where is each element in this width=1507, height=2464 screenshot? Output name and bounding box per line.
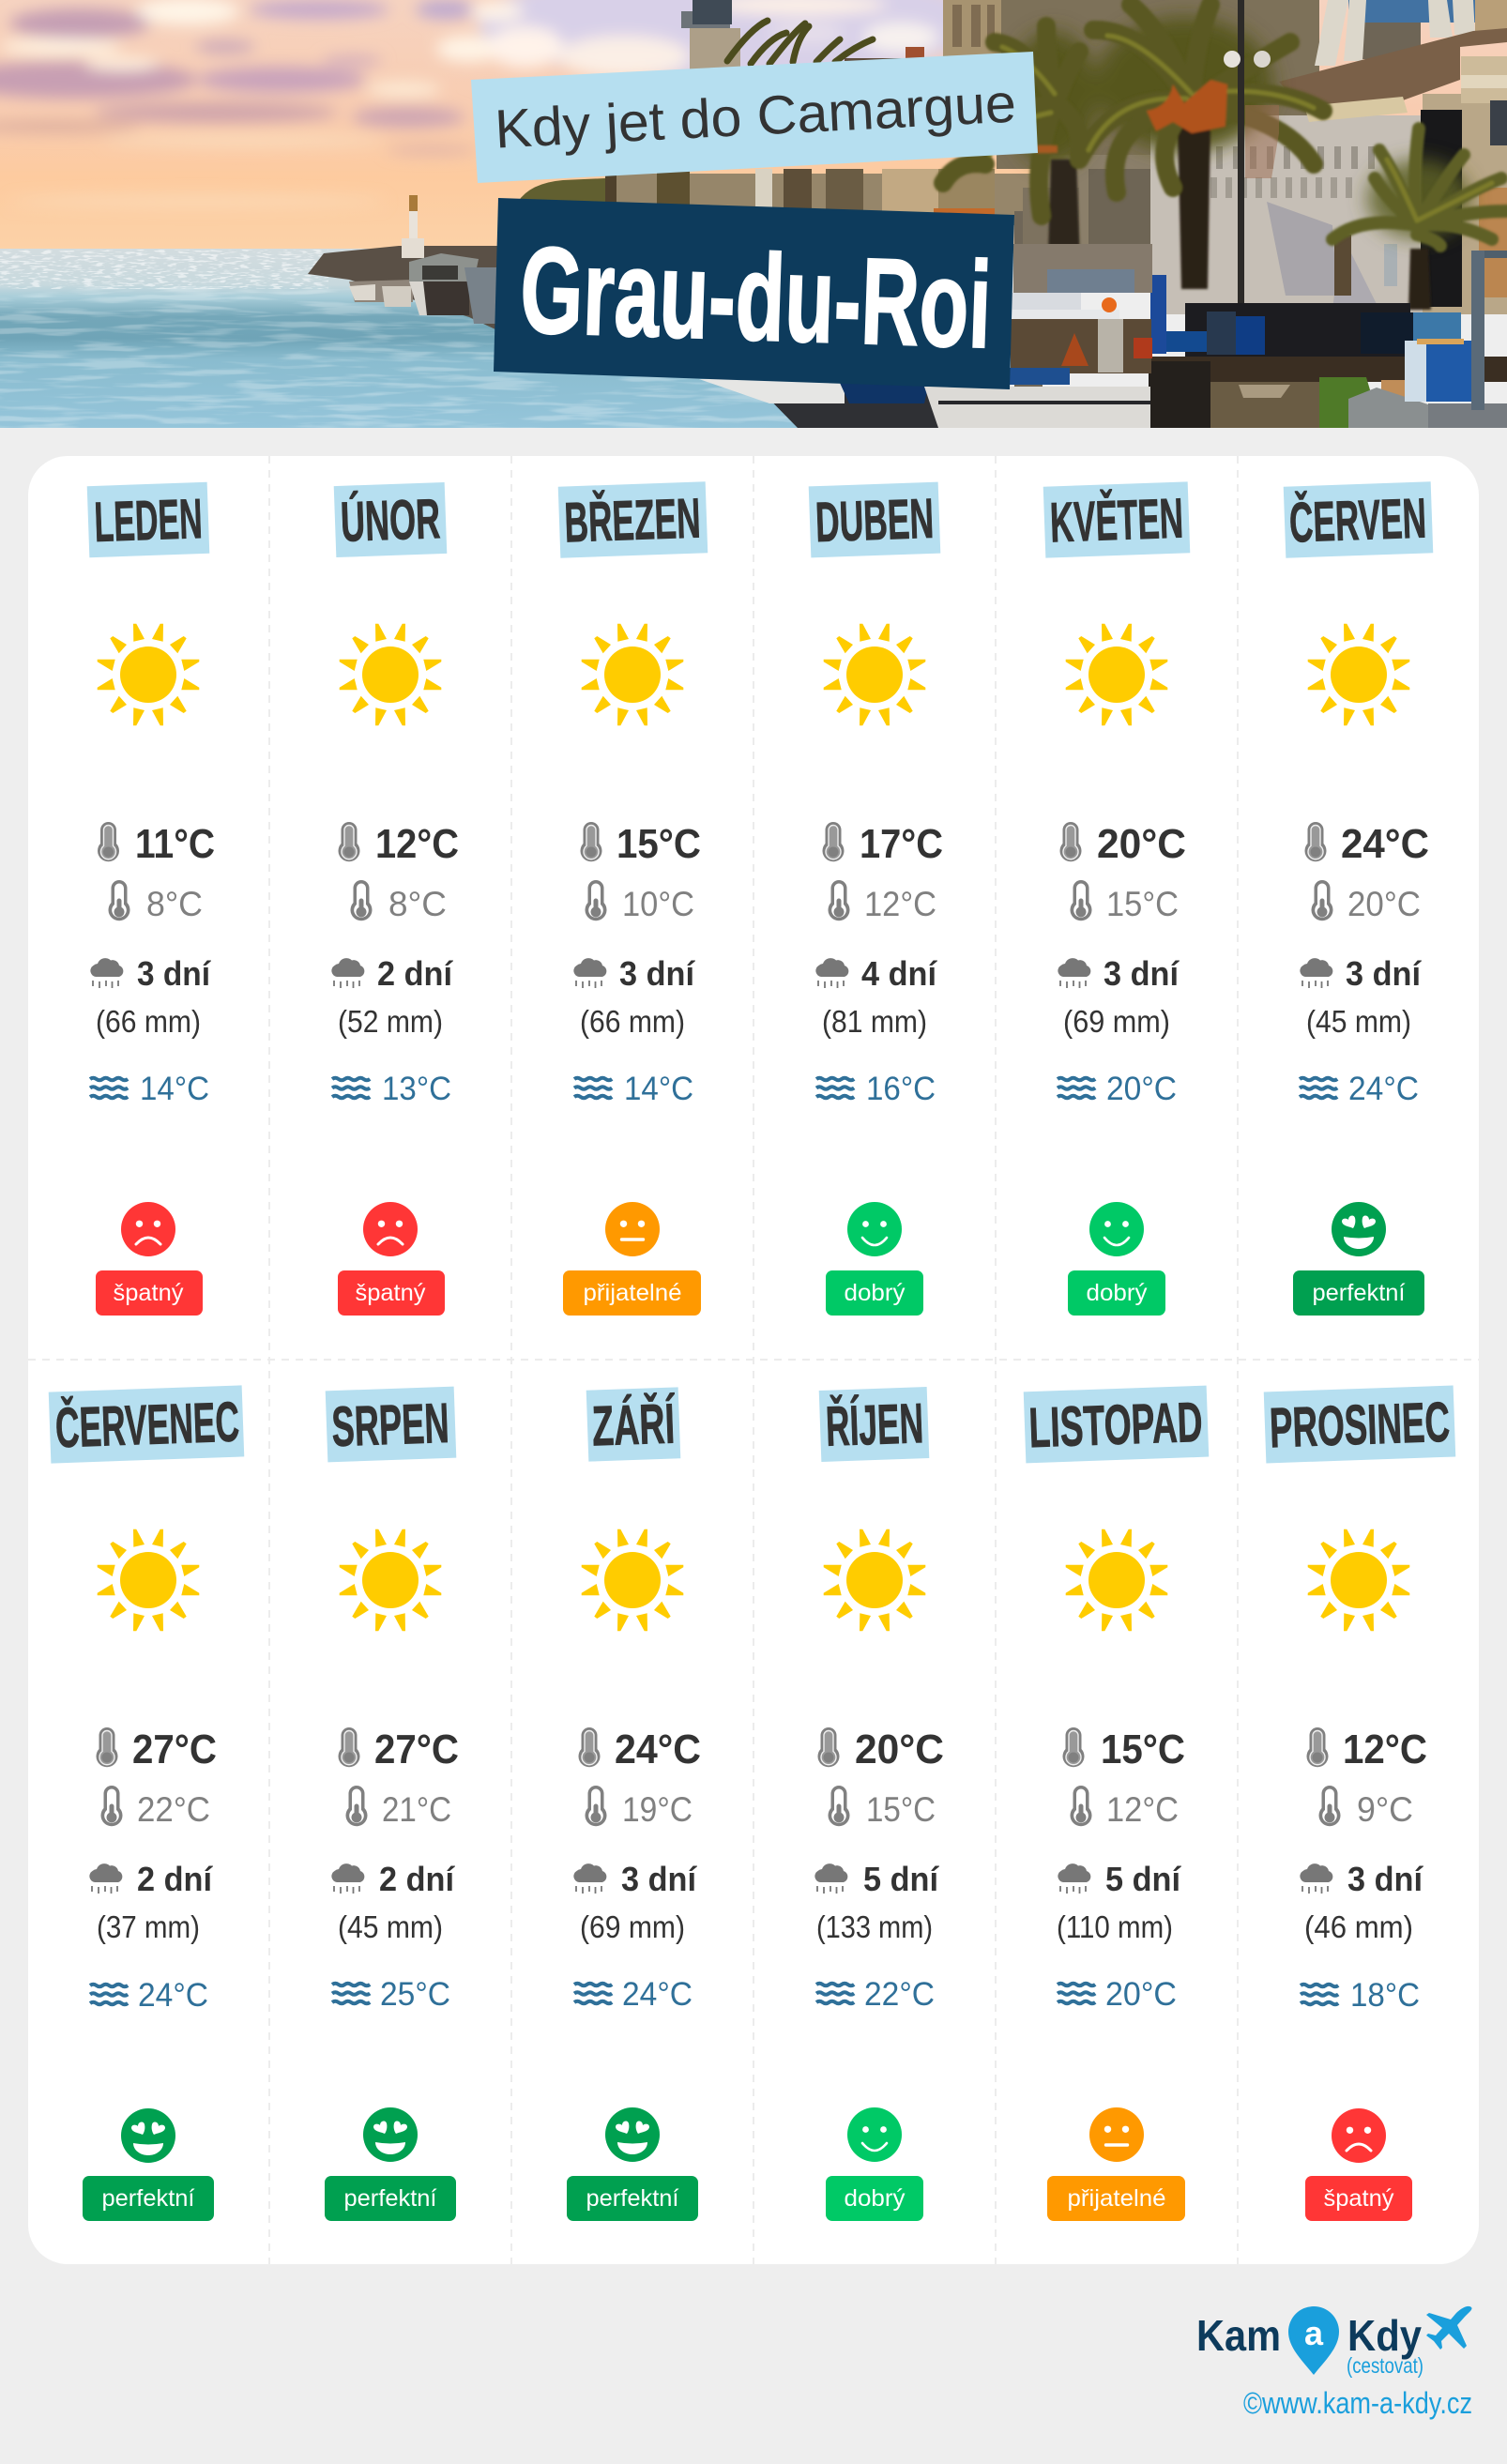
- sea temperature: 24°C: [1348, 1071, 1419, 1107]
- rating: [563, 1202, 701, 1316]
- rain days: 3 dní: [619, 954, 695, 993]
- sea temperature: 18°C: [1350, 1977, 1420, 2014]
- low temperature: 10°C: [622, 885, 694, 923]
- high temperature: [98, 821, 215, 867]
- rain days: [1058, 1860, 1181, 1898]
- sea temperature: [1058, 1976, 1177, 2013]
- low temperature: 9°C: [1357, 1790, 1413, 1829]
- low temperature: [828, 1786, 936, 1829]
- white building wall: [1150, 115, 1423, 314]
- logo: Kam a Kdy: (cestovat): [1347, 2353, 1423, 2378]
- month label: ŘÍJEN: [825, 1392, 924, 1458]
- low temperature: [1070, 1786, 1179, 1829]
- low temperature: 21°C: [382, 1790, 451, 1829]
- rain days: 5 dní: [863, 1860, 939, 1898]
- blue tub: [1426, 341, 1471, 402]
- high temperature: 27°C: [374, 1726, 459, 1772]
- month column: Červenec: [49, 1385, 244, 2221]
- rain days: 3 dní: [1347, 1860, 1423, 1898]
- high temperature: 24°C: [1341, 821, 1429, 867]
- low temperature: 12°C: [864, 885, 936, 923]
- high temperature: [1060, 821, 1186, 867]
- month column: Leden: [87, 482, 215, 1316]
- high temperature: [96, 1726, 217, 1772]
- rating: špatný: [113, 1280, 184, 1306]
- rain days: 5 dní: [1105, 1860, 1181, 1898]
- high temperature: 11°C: [135, 821, 215, 867]
- high temperature: 17°C: [860, 821, 943, 867]
- chairs and bins on the quay: [1185, 303, 1410, 357]
- month label: LEDEN: [93, 487, 204, 554]
- rating: perfektní: [586, 2185, 679, 2212]
- rating: [1293, 1202, 1424, 1316]
- icon: sun: [824, 624, 925, 725]
- rain days: 3 dní: [137, 954, 211, 993]
- rainfall: (69 mm): [580, 1909, 685, 1944]
- title tag: Kdy jet do Camargue: Kdy jet do Camargue: [494, 73, 1017, 160]
- right-hand building: [1423, 94, 1507, 314]
- high temperature: 15°C: [1101, 1726, 1185, 1772]
- high temperature: [580, 821, 701, 867]
- month column: Září: [567, 1387, 701, 2221]
- month label: [558, 481, 708, 558]
- sea temperature: 13°C: [382, 1071, 451, 1107]
- low temperature: [586, 880, 694, 923]
- rating: špatný: [355, 1280, 426, 1306]
- month label: [1043, 481, 1190, 558]
- lighthouse: [690, 28, 740, 69]
- rainfall: (46 mm): [1304, 1909, 1413, 1944]
- rating: dobrý: [845, 1280, 906, 1306]
- rating: [325, 2107, 456, 2221]
- month column: Listopad: [1024, 1386, 1209, 2221]
- tiled roof: [1279, 28, 1507, 110]
- high temperature: [1304, 821, 1429, 867]
- month label: DUBEN: [814, 487, 935, 554]
- palm crowns: dense foliage: [1008, 17, 1470, 238]
- low temperature: [345, 1786, 451, 1829]
- rain days: [90, 954, 211, 993]
- website credit: ©www.kam-a-kdy.cz: [1243, 2386, 1472, 2420]
- icon: sun: [824, 1529, 925, 1631]
- month label: LISTOPAD: [1028, 1391, 1204, 1459]
- high temperature: 12°C: [375, 821, 459, 867]
- rating: [96, 1202, 203, 1316]
- icon: sun: [340, 1529, 441, 1631]
- rain days: [814, 1860, 939, 1898]
- rating: dobrý: [1087, 1280, 1148, 1306]
- rating: dobrý: [845, 2185, 906, 2212]
- rain days: [331, 954, 453, 993]
- sea: [0, 249, 798, 428]
- panel: monthly climate card: [28, 456, 1479, 2264]
- month label: SRPEN: [330, 1392, 450, 1458]
- month label: ÚNOR: [340, 487, 441, 554]
- rain days: [1058, 954, 1180, 993]
- icon: map pin: a: [1304, 2314, 1324, 2352]
- low temperature: 19°C: [622, 1790, 693, 1829]
- rating: [1047, 2107, 1185, 2221]
- quay ledge and foreground: [1149, 357, 1507, 382]
- high temperature: [578, 1726, 701, 1772]
- title block: Grau-du-Roi: [494, 198, 1014, 389]
- rating: [567, 2107, 698, 2221]
- rain days: [1300, 954, 1422, 993]
- rainfall: (45 mm): [338, 1909, 443, 1944]
- high temperature: [338, 821, 459, 867]
- rating: [338, 1202, 445, 1316]
- icon: sun: [582, 624, 683, 725]
- month label: BŘEZEN: [563, 486, 702, 555]
- rating: perfektní: [1312, 1280, 1406, 1306]
- sea temperature: [90, 1071, 209, 1107]
- sea temperature: 14°C: [624, 1071, 693, 1107]
- month label: [586, 1387, 680, 1462]
- sea temperature: [574, 1071, 693, 1107]
- rainfall: (66 mm): [96, 1004, 201, 1039]
- low temperature: [1312, 880, 1421, 923]
- logo: Kam a Kdy: Kam: [1196, 2311, 1281, 2360]
- icon: sun: [1308, 1529, 1409, 1631]
- rating: špatný: [1323, 2185, 1394, 2212]
- rainfall: (37 mm): [97, 1909, 200, 1944]
- sea temperature: 22°C: [864, 1976, 935, 2013]
- month label: [1284, 481, 1433, 558]
- rain days: 2 dní: [379, 1860, 455, 1898]
- month column: Prosinec: [1264, 1385, 1455, 2221]
- rainfall: (45 mm): [1306, 1004, 1411, 1039]
- tall buildings on the right: [997, 0, 1319, 169]
- low temperature: [1319, 1786, 1413, 1829]
- high temperature: [338, 1726, 459, 1772]
- rating: perfektní: [101, 2185, 195, 2212]
- sea temperature: [332, 1976, 450, 2013]
- month column: Červen: [1284, 481, 1433, 1316]
- dark water under the quay: [773, 393, 938, 428]
- month column: Únor: [331, 482, 459, 1316]
- low temperature: 15°C: [866, 1790, 936, 1829]
- icon: sun: [98, 624, 199, 725]
- rainfall: (69 mm): [1063, 1004, 1170, 1039]
- sea temperature: 20°C: [1105, 1976, 1177, 2013]
- sea temperature: [90, 1977, 208, 2014]
- hero photo: harbour at sunset: [0, 0, 1507, 428]
- high temperature: 20°C: [855, 1726, 944, 1772]
- month column: Srpen: [325, 1387, 459, 2221]
- sea temperature: [816, 1071, 936, 1107]
- rain days: [1300, 1860, 1423, 1898]
- low temperature: 8°C: [388, 885, 447, 923]
- rain days: 3 dní: [1346, 954, 1422, 993]
- high temperature: 15°C: [616, 821, 701, 867]
- high temperature: [822, 821, 943, 867]
- sea temperature: [1300, 1071, 1419, 1107]
- rain days: 2 dní: [377, 954, 453, 993]
- icon: sun: [98, 1529, 199, 1631]
- high temperature: [1306, 1726, 1427, 1772]
- icon: map pin: [1288, 2306, 1339, 2375]
- sea temperature: [1058, 1071, 1177, 1107]
- low temperature: 20°C: [1347, 885, 1421, 923]
- icon: plane: [1426, 2306, 1472, 2350]
- month label: [49, 1385, 244, 1464]
- rain days: [89, 1860, 213, 1898]
- low temperature: [109, 880, 203, 923]
- icon: sun: [582, 1529, 683, 1631]
- rating: [826, 1202, 923, 1316]
- month label: [819, 1387, 929, 1462]
- high temperature: 24°C: [615, 1726, 701, 1772]
- month column: Říjen: [814, 1387, 944, 2221]
- sea temperature: [574, 1976, 693, 2013]
- month label: ČERVENEC: [54, 1391, 240, 1459]
- far pier with boats: [308, 246, 497, 330]
- rain days: 2 dní: [137, 1860, 213, 1898]
- sea temperature: 24°C: [138, 1977, 208, 2014]
- month label: KVĚTEN: [1049, 487, 1184, 554]
- month label: ZÁŘÍ: [591, 1392, 677, 1458]
- month label: [87, 482, 209, 557]
- rain days: 3 dní: [621, 1860, 697, 1898]
- rainfall: (110 mm): [1057, 1909, 1173, 1944]
- sea temperature: 25°C: [380, 1976, 450, 2013]
- icon: sun: [340, 624, 441, 725]
- sea temperature: 16°C: [866, 1071, 936, 1107]
- high temperature: 12°C: [1343, 1726, 1427, 1772]
- rating: přijatelné: [584, 1280, 681, 1306]
- high temperature: 27°C: [132, 1726, 217, 1772]
- rain days: [331, 1860, 455, 1898]
- month label: [809, 482, 940, 557]
- rainfall: (66 mm): [580, 1004, 685, 1039]
- rain days: 4 dní: [861, 954, 937, 993]
- rainfall: (81 mm): [822, 1004, 927, 1039]
- month label: [334, 482, 447, 557]
- rain days: [573, 954, 695, 993]
- low temperature: 15°C: [1106, 885, 1179, 923]
- month column: Duben: [809, 482, 943, 1316]
- rating: perfektní: [343, 2185, 437, 2212]
- rain days: [815, 954, 937, 993]
- icon: sun: [1066, 624, 1167, 725]
- sea temperature: [1301, 1977, 1420, 2014]
- sea temperature: 14°C: [140, 1071, 209, 1107]
- town between titles: [605, 174, 1042, 225]
- rain days: 3 dní: [1104, 954, 1180, 993]
- logo: Kam a Kdy: [1196, 2306, 1472, 2378]
- sea temperature: [332, 1071, 451, 1107]
- rating: [1068, 1202, 1165, 1316]
- high temperature: [818, 1726, 944, 1772]
- palm trees: [943, 5, 1507, 310]
- high temperature: [1062, 1726, 1185, 1772]
- month label: [1024, 1386, 1209, 1463]
- palm behind title: [727, 21, 873, 64]
- logo: Kam a Kdy: Kdy: [1347, 2311, 1422, 2360]
- icon: sun: [1066, 1529, 1167, 1631]
- low temperature: [351, 880, 447, 923]
- month column: Březen: [558, 481, 708, 1316]
- rainfall: (52 mm): [338, 1004, 443, 1039]
- sea temperature: 20°C: [1106, 1071, 1177, 1107]
- low temperature: [586, 1786, 693, 1829]
- rating: přijatelné: [1068, 2185, 1165, 2212]
- month label: [326, 1387, 456, 1462]
- boat in the foreground: [1013, 244, 1152, 293]
- low temperature: 8°C: [146, 885, 203, 923]
- low temperature: 22°C: [137, 1790, 210, 1829]
- rating: [1305, 2108, 1412, 2221]
- low temperature: [1070, 880, 1179, 923]
- icon: sun: [1308, 624, 1409, 725]
- high temperature: 20°C: [1097, 821, 1186, 867]
- rating: [83, 2108, 214, 2221]
- low temperature: [828, 880, 936, 923]
- title block: Grau-du-Roi: Grau-du-Roi: [518, 221, 994, 373]
- lamp post: [1224, 0, 1279, 305]
- rain days: [573, 1860, 697, 1898]
- low temperature: [101, 1786, 210, 1829]
- sea temperature: 24°C: [622, 1976, 693, 2013]
- tower struts and upper building: [1362, 22, 1421, 59]
- rating: [826, 2107, 923, 2221]
- sea temperature: [816, 1976, 935, 2013]
- month column: Květen: [1043, 481, 1190, 1316]
- low temperature: 12°C: [1106, 1790, 1179, 1829]
- title tag: Kdy jet do Camargue: [471, 52, 1038, 183]
- rainfall: (133 mm): [816, 1909, 933, 1944]
